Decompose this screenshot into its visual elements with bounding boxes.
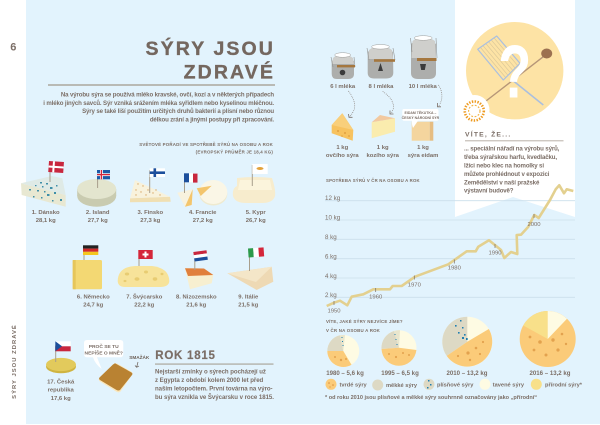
speech bubble: eidam	[402, 109, 440, 128]
label: Iceland: 2. Island	[86, 210, 110, 216]
label: goat cheese: kozího sýra	[366, 153, 400, 159]
label: Cyprus: 26,7 kg	[246, 218, 266, 224]
label: Cyprus	[246, 210, 266, 224]
text: history of cheese: bu sýra vznikla ve Švýcarsku v roce 1815.	[155, 393, 274, 401]
label: 1980: 1980 – 5,6 kg	[326, 370, 364, 377]
label: eidam cheese: sýra eidam	[408, 153, 438, 159]
label: Czech Republic: 17,6 kg	[51, 396, 71, 402]
text: history of cheese: Nejstarší zmínky o sýrech pocházejí už	[155, 368, 266, 375]
smažák arrow label	[129, 353, 150, 367]
label: Germany	[77, 294, 110, 308]
cheese 2: Iceland	[77, 170, 116, 207]
text: did you know: Zemědělství v naší pražské	[464, 179, 540, 186]
line chart: cheese consumption: 1960	[369, 294, 383, 300]
circle illustration	[466, 22, 563, 119]
label: Switzerland: 22,2 kg	[134, 302, 155, 308]
text: did you know: třeba sýrařskou harfu, kvedlačku,	[464, 154, 557, 161]
label: goat cheese: 1 kg	[377, 145, 389, 151]
label: Netherlands: 21,6 kg	[186, 302, 207, 308]
speech bubble: PROČ SE TU	[89, 343, 119, 350]
intro text: Sýry se také liší použitím určitých druhů bakterií a plísní nebo různou	[82, 108, 274, 115]
legend: plísňové sýry	[437, 382, 474, 388]
label: Iceland: 27,7 kg	[88, 218, 108, 224]
label: Switzerland	[126, 292, 163, 308]
label: 8 l: 8 l mléka	[369, 84, 394, 90]
line chart: cheese consumption: 6 kg	[325, 253, 337, 260]
text: did you know: můžete prohlédnout v expozici	[464, 171, 550, 178]
label: France	[189, 210, 217, 224]
icon: wreath logo	[460, 95, 490, 125]
line chart: cheese consumption	[325, 185, 575, 314]
line chart: cheese consumption: 1950	[327, 308, 341, 314]
label: Finland	[138, 210, 163, 224]
dotted arrow: 8 l	[383, 92, 394, 114]
heading: ROK 1815: ROK 1815	[155, 350, 216, 362]
title: SÝRY JSOU	[146, 36, 275, 60]
legend: tavené sýry	[493, 382, 525, 388]
speech bubble: NEPÍŠE O MNĚ?	[85, 348, 123, 356]
heading: what cheese we eat	[326, 319, 403, 333]
line chart: cheese consumption: 12 kg	[325, 195, 341, 202]
cheese 6: Germany	[73, 245, 102, 289]
text: history of cheese: z Egypta z období kolem 2000 let před	[155, 377, 264, 384]
heading: did you know: VÍTE, ŽE...	[465, 130, 511, 138]
chart heading: world ranking: SVĚTOVÉ POŘADÍ VE SPOTŘEBĚ SÝRŮ NA OSOBU A ROK	[139, 142, 274, 147]
cheese 4: France	[177, 173, 227, 207]
page number: 6	[10, 42, 16, 54]
dotted arrow: 6 l	[348, 91, 355, 117]
pie: 2010	[442, 317, 492, 367]
label: Czech Republic	[47, 378, 75, 402]
label: 1995: 1995 – 6,5 kg	[381, 370, 419, 377]
smažák arrow label: SMAŽÁK	[129, 353, 150, 360]
label: France: 4. Francie	[189, 210, 217, 216]
panel: did you know	[455, 0, 575, 217]
milk can: 10 l	[410, 36, 437, 79]
heading: what cheese we eat: VÍTE, JAKÉ SÝRY NEJVÍCE JÍME?	[326, 319, 403, 324]
speech bubble: eidam: ČESKÝ NÁRODNÍ SÝR	[402, 115, 440, 120]
label: sheep cheese: 1 kg	[336, 145, 349, 151]
chart heading: world ranking: (EVROPSKÝ PRŮMĚR JE 18,4 KG)	[196, 150, 273, 154]
line chart: cheese consumption: 1980	[448, 266, 462, 272]
label: 2010: 2010 – 13,2 kg	[446, 370, 488, 377]
label: Switzerland: 7. Švýcarsko	[126, 292, 163, 300]
label: Denmark	[32, 210, 60, 224]
label: sheep cheese	[326, 145, 359, 159]
text: did you know: výstavní budově?	[464, 188, 514, 195]
intro text: i mléko jiných savců. Sýr vzniká srážením mléka syřidlem nebo kyselinou mléčnou.	[43, 100, 274, 107]
circle illustration: ?	[498, 30, 531, 113]
text: history of cheese: naším letopočtem. První továrna na výro-	[155, 386, 273, 393]
heading: what cheese we eat: V ČR NA OSOBU A ROK	[326, 328, 381, 333]
line chart: cheese consumption: 2000	[527, 222, 541, 228]
label: 2016: 2016 – 13,2 kg	[530, 370, 571, 377]
cheese: goat	[372, 115, 395, 138]
label: Germany: 24,7 kg	[83, 302, 104, 308]
cheese 1: Denmark	[21, 161, 66, 207]
cheese 8: Netherlands	[185, 250, 213, 289]
icon: fried cheese	[99, 363, 133, 392]
label: France: 27,2 kg	[193, 218, 213, 224]
label: Iceland	[86, 210, 110, 224]
dotted arrow: 10 l	[438, 85, 442, 107]
text: history of cheese	[155, 368, 274, 401]
line chart: cheese consumption: 4 kg	[325, 273, 337, 280]
label: goat cheese	[366, 145, 400, 159]
label: 6 l: 6 l mléka	[330, 84, 356, 90]
cheese 9: Italy	[227, 247, 273, 290]
pie: 1995	[381, 330, 416, 366]
label: Italy: 21,5 kg	[238, 302, 259, 308]
cheese 17: Czech Republic	[46, 341, 76, 373]
label: Finland: 3. Finsko	[138, 210, 163, 216]
title: ZDRAVÉ	[184, 60, 275, 84]
text: did you know	[464, 146, 560, 195]
label: Denmark: 28,1 kg	[36, 218, 56, 224]
title	[146, 36, 275, 84]
text: did you know: ... speciální nářadí na výrobu sýrů,	[464, 146, 560, 153]
label: Italy: 9. Itálie	[238, 294, 259, 300]
legend: přírodní sýry*	[545, 382, 583, 388]
cheese: sheep	[332, 113, 353, 141]
label: Netherlands: 8. Nizozemsko	[176, 294, 217, 300]
label: Czech Republic: 17. Česká	[47, 378, 75, 386]
label: Germany: 6. Německo	[77, 294, 110, 300]
speech bubble	[84, 340, 123, 369]
label: 10 l: 10 l mléka	[409, 84, 438, 90]
pie: 1980	[327, 335, 359, 367]
cheese: eidam	[412, 122, 433, 141]
cheese 3: Finland	[130, 168, 171, 202]
speech bubble: eidam: EIDAM TĚKUTKA –	[405, 110, 436, 115]
label: sheep cheese: ovčího sýra	[326, 153, 359, 159]
label: Czech Republic: republika	[48, 388, 75, 394]
pie: 2016	[520, 311, 576, 367]
chart heading: consumption: SPOTŘEBA SÝRŮ V ČR NA OSOBU A ROK	[326, 178, 421, 183]
text: did you know: lžíci nebo klec na homolky si	[464, 163, 544, 170]
line chart: cheese consumption: 1970	[408, 282, 422, 288]
intro text: délkou zrání a jinými postupy při zpracování.	[150, 116, 274, 123]
footnote: * od roku 2010 jsou plísňové a měkké sýry souhrnně označovány jako „přírodní“	[325, 395, 537, 401]
label: Netherlands	[176, 294, 217, 308]
label: eidam cheese: 1 kg	[417, 145, 429, 151]
line chart: cheese consumption: 1990	[488, 250, 502, 256]
milk can: 6 l	[331, 53, 355, 79]
chart heading: world ranking	[139, 142, 274, 154]
intro text: Na výrobu sýra se používá mléko kravské, ovčí, kozí a v některých případech	[61, 91, 274, 98]
legend	[326, 379, 583, 390]
label: Finland: 27,3 kg	[140, 218, 161, 224]
label: Italy	[238, 294, 259, 308]
cheese 7: Switzerland	[118, 250, 169, 287]
label: Denmark: 1. Dánsko	[32, 210, 60, 216]
milk can: 8 l	[367, 44, 395, 78]
line chart: cheese consumption: 2 kg	[325, 292, 337, 299]
line chart: cheese consumption: 8 kg	[325, 234, 337, 241]
intro text	[43, 91, 274, 123]
line chart: cheese consumption: 10 kg	[325, 215, 341, 222]
legend: měkké sýry	[386, 383, 418, 389]
sidebar label: SÝRY JSOU ZDRAVÉ	[10, 324, 18, 399]
label: eidam cheese	[408, 145, 438, 159]
legend: tvrdé sýry	[340, 382, 368, 388]
label: Cyprus: 5. Kypr	[246, 210, 266, 216]
cheese 5: Cyprus	[233, 164, 275, 203]
